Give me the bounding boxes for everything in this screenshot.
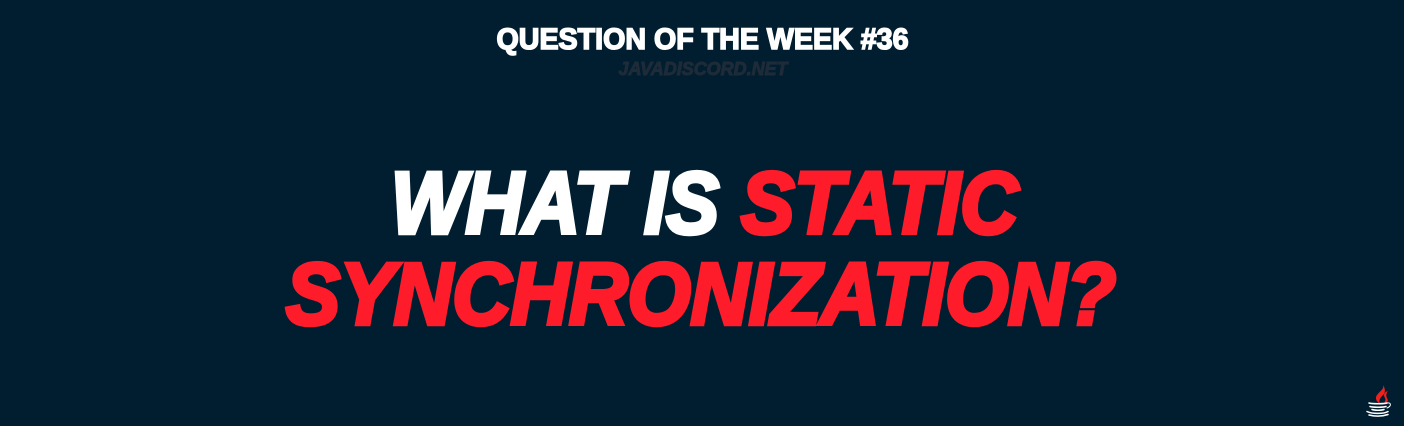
title: main question	[286, 155, 1116, 343]
icon: cup	[1367, 403, 1390, 416]
title word: what is: WHAT IS	[391, 155, 719, 252]
heading: question of the week: QUESTION OF THE WEEK #36	[496, 23, 908, 56]
icon: java coffee cup logo	[1367, 385, 1390, 416]
subheading: site name: JAVADISCORD.NET	[618, 58, 789, 79]
icon: flame	[1376, 385, 1388, 404]
title word: synchronization: SYNCHRONIZATION?	[286, 246, 1116, 343]
title word: static: STATIC	[741, 155, 1019, 252]
